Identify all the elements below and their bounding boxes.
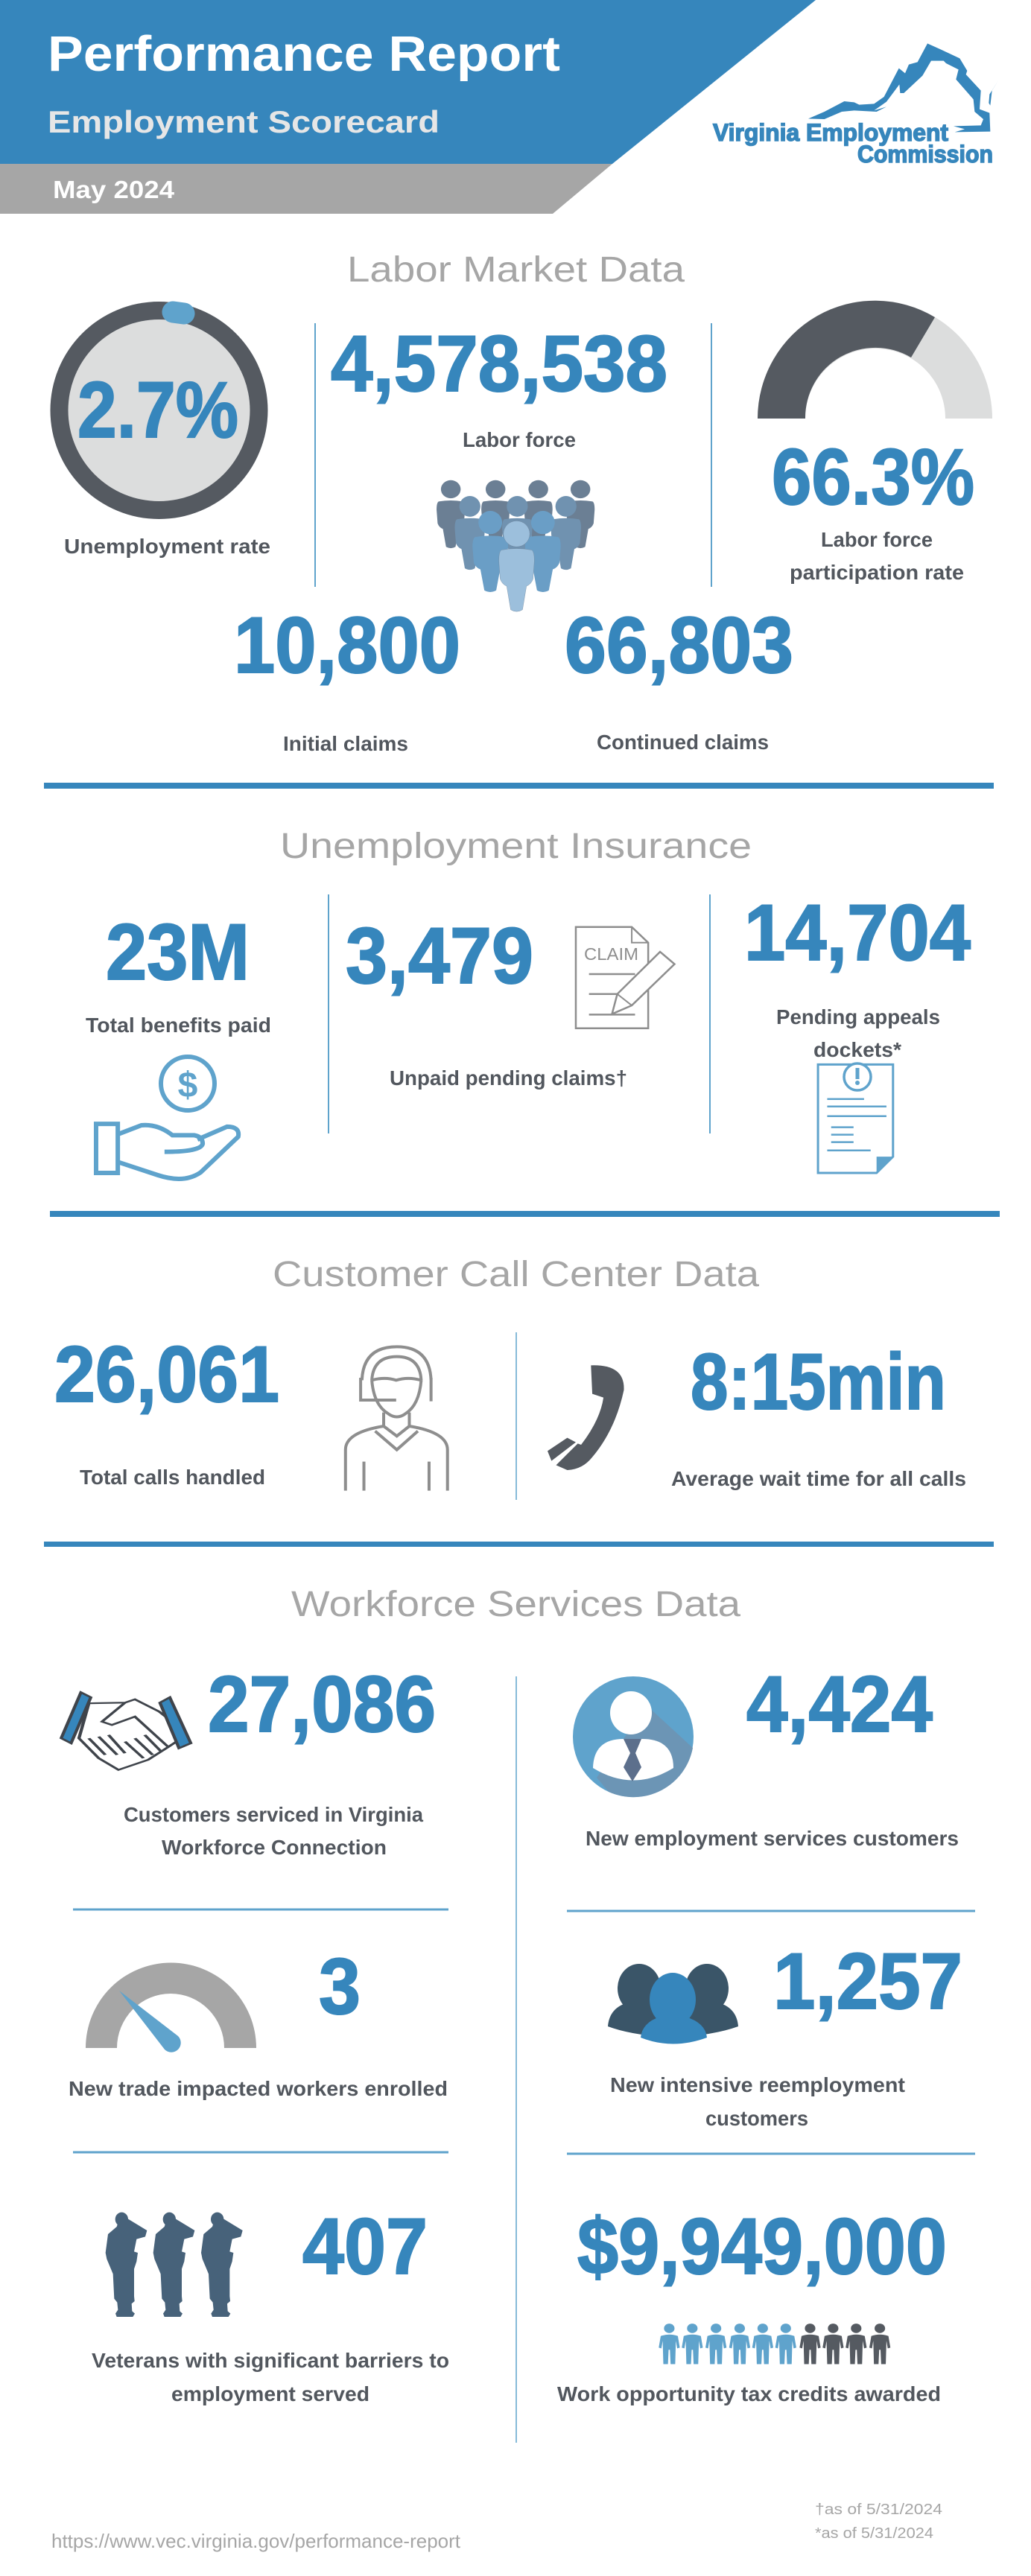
logo: Virginia map outline — [808, 43, 998, 132]
label: pending appeals dockets: dockets* — [813, 1038, 901, 1061]
label: unemployment rate: Unemployment rate — [64, 535, 270, 558]
stat: new employment services customers: 4,424 — [746, 1659, 933, 1749]
label: initial claims: Initial claims — [283, 732, 408, 755]
banner: grey date strip — [0, 164, 612, 214]
stat: unpaid pending claims: 3,479 — [346, 911, 533, 1000]
stat: total calls handled: 26,061 — [54, 1329, 279, 1419]
heading: Labor Market Data — [347, 250, 685, 290]
label: customers serviced: Customers serviced in Virginia — [124, 1803, 423, 1826]
stat: labor force: 4,578,538 — [331, 319, 667, 408]
stat: initial claims: 10,800 — [234, 600, 460, 690]
label: total benefits paid: Total benefits paid — [86, 1014, 271, 1037]
section: Labor Market Data — [51, 250, 992, 755]
heading: Customer Call Center Data — [273, 1255, 759, 1294]
stat: 66.3%: 66.3% — [772, 432, 974, 521]
label: veterans served — [92, 2349, 449, 2405]
icon: hand holding dollar coin — [96, 1057, 238, 1179]
label: customers serviced: Workforce Connection — [162, 1836, 387, 1859]
donut chart: unemployment rate — [51, 302, 268, 519]
header banner — [0, 0, 816, 214]
stat: work opportunity tax credits: $9,949,000 — [577, 2201, 947, 2291]
stat: veterans served: 407 — [302, 2201, 428, 2291]
label: total calls handled: Total calls handled — [80, 1466, 265, 1489]
label: new intensive reemployment customers — [610, 2073, 905, 2130]
icon: claim form with pencil: CLAIM — [584, 944, 638, 964]
label: work opportunity tax credits: Work opportunity tax credits awarded — [557, 2382, 941, 2405]
date: May 2024 — [53, 176, 175, 203]
logo: wordmark line 2: Commission — [857, 141, 993, 168]
icon: hand holding dollar coin: $ — [178, 1066, 198, 1105]
stat: new trade impacted workers: 3 — [319, 1941, 361, 2031]
stat: average wait time: 8:15min — [691, 1337, 946, 1426]
icon: telephone handset — [548, 1365, 624, 1470]
label: labor force participation rate: Labor force — [821, 528, 933, 551]
label: labor force: Labor force — [463, 428, 576, 451]
label: new trade impacted workers: New trade impacted workers enrolled — [69, 2077, 448, 2100]
label: veterans served: Veterans with significant barriers to — [92, 2349, 449, 2372]
icon: handshake — [61, 1692, 191, 1770]
footnotes: †as of 5/31/2024 — [815, 2502, 942, 2518]
stat: continued claims: 66,803 — [565, 600, 793, 690]
label: customers serviced — [124, 1803, 423, 1859]
title: Performance Report — [48, 26, 560, 82]
stat: customers serviced: 27,086 — [208, 1659, 436, 1749]
icon: call center agent — [346, 1346, 448, 1491]
label: new intensive reemployment customers: customers — [705, 2107, 808, 2130]
heading: Unemployment Insurance — [280, 827, 752, 866]
stat: 2.7%: 2.7% — [77, 365, 238, 454]
icon: three saluting veterans — [106, 2213, 243, 2317]
icon: businessperson in circle — [573, 1676, 694, 1797]
subtitle: Employment Scorecard — [48, 104, 440, 139]
footnotes — [815, 2502, 942, 2542]
label: pending appeals dockets: Pending appeals — [776, 1005, 940, 1028]
label: labor force participation rate: participation rate — [790, 561, 964, 584]
stat: new intensive reemployment customers: 1,257 — [773, 1936, 962, 2026]
label: average wait time: Average wait time for all calls — [671, 1467, 966, 1490]
section: Customer Call Center Data — [54, 1255, 966, 1500]
banner: blue title panel — [0, 0, 816, 164]
source URL: https://www.vec.virginia.gov/performance-report — [51, 2530, 461, 2552]
pictogram: ten people, six highlighted — [659, 2324, 890, 2364]
icon: speedometer gauge — [86, 1963, 256, 2052]
label: veterans served: employment served — [171, 2382, 369, 2405]
icon: crowd of people — [437, 480, 594, 611]
footnotes: *as of 5/31/2024 — [815, 2525, 933, 2542]
icon: claim form with pencil — [576, 927, 674, 1028]
gauge chart: participation rate — [758, 301, 992, 419]
label: pending appeals dockets — [776, 1005, 940, 1061]
logo: wordmark line 1: Virginia Employment — [713, 119, 948, 146]
stat: total benefits paid: 23M — [106, 907, 250, 996]
section: Workforce Services Data — [61, 1585, 975, 2443]
icon: group of three people — [608, 1964, 738, 2044]
heading: Workforce Services Data — [291, 1585, 740, 1624]
label: labor force participation rate — [790, 528, 964, 584]
stat: pending appeals dockets: 14,704 — [744, 888, 971, 977]
section: Unemployment Insurance — [86, 827, 971, 1179]
logo: Virginia Employment Commission — [713, 43, 998, 168]
label: new intensive reemployment customers: New intensive reemployment — [610, 2073, 905, 2096]
label: unpaid pending claims: Unpaid pending claims† — [390, 1066, 627, 1090]
icon: document with exclamation mark — [818, 1063, 893, 1173]
label: continued claims: Continued claims — [597, 731, 769, 754]
label: new employment services customers: New employment services customers — [586, 1827, 959, 1850]
